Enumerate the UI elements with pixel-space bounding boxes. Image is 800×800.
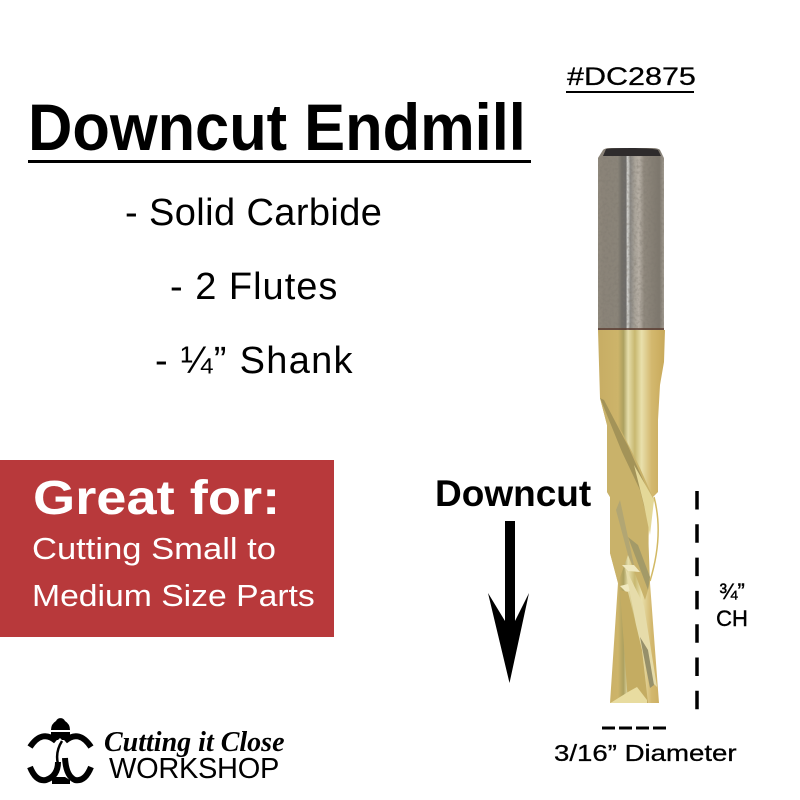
panel text line 1: Cutting Small to <box>32 531 276 566</box>
arrow: downward <box>488 521 529 683</box>
product code text: #DC2875 <box>567 63 696 91</box>
feature: 2 flutes: - 2 Flutes <box>170 266 338 308</box>
logo <box>27 718 284 785</box>
feature: shank: - ¼” Shank <box>155 340 354 382</box>
icon: endmill bit <box>598 148 665 703</box>
lower flute <box>600 398 654 600</box>
product code <box>566 64 694 93</box>
cut height label <box>716 579 748 631</box>
logo workshop text: WORKSHOP <box>109 753 279 785</box>
cut height label: CH <box>716 606 748 631</box>
cut height dashed line <box>695 491 699 710</box>
panel heading: Great for: <box>33 472 280 525</box>
diameter label: 3/16” Diameter <box>554 740 737 766</box>
panel: great for <box>0 460 334 637</box>
downcut label: Downcut <box>435 473 591 514</box>
panel text line 2: Medium Size Parts <box>32 578 315 613</box>
feature: solid carbide: - Solid Carbide <box>125 192 382 234</box>
gold body <box>598 330 665 703</box>
logo script text: Cutting it Close <box>104 727 284 758</box>
diameter dashed line <box>602 726 666 730</box>
shank <box>598 148 664 330</box>
cut height label: ¾” <box>719 579 745 604</box>
logo mark <box>27 718 94 784</box>
title: Downcut Endmill <box>28 90 526 164</box>
